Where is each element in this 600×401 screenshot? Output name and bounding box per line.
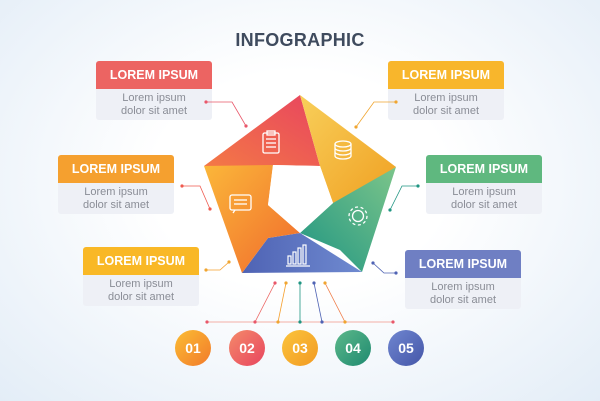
number circle 01: 01 [185, 340, 201, 356]
number circle 04: 04 [345, 340, 361, 356]
number circle 02: 02 [239, 340, 255, 356]
number circle 03: 03 [292, 340, 308, 356]
segment: green [300, 167, 396, 272]
box: mid-right green: LOREM IPSUM [440, 162, 528, 176]
icon: coins [335, 141, 351, 159]
box: bottom-left yellow: dolor sit amet [108, 291, 174, 303]
box: mid-right green: Lorem ipsum [452, 186, 516, 198]
box: mid-left orange: LOREM IPSUM [72, 162, 160, 176]
number circle 04 [335, 330, 371, 366]
box: top-right yellow [388, 61, 504, 120]
title: INFOGRAPHIC [235, 30, 365, 50]
segment: blue [242, 233, 362, 273]
icon: clipboard [263, 131, 279, 153]
icon: chat [230, 195, 251, 213]
number circle 05 [388, 330, 424, 366]
number circle 02 [229, 330, 265, 366]
number circle 05: 05 [398, 340, 414, 356]
segment: yellow [300, 95, 396, 203]
number circle 01 [175, 330, 211, 366]
number circle 03 [282, 330, 318, 366]
box: top-left red: LOREM IPSUM [110, 68, 198, 82]
box: top-right yellow: Lorem ipsum [414, 92, 478, 104]
box: bottom-left yellow [83, 247, 199, 306]
box: mid-left orange [58, 155, 174, 214]
connector lines [182, 102, 418, 322]
box: mid-right green: dolor sit amet [451, 199, 517, 211]
box: bottom-right blue: Lorem ipsum [431, 281, 495, 293]
box: bottom-right blue [405, 250, 521, 309]
box: top-right yellow: LOREM IPSUM [402, 68, 490, 82]
box: bottom-left yellow: LOREM IPSUM [97, 254, 185, 268]
icon: bar chart [286, 245, 310, 266]
segment: orange [204, 165, 300, 273]
box: top-left red: dolor sit amet [121, 105, 187, 117]
box: mid-right green [426, 155, 542, 214]
segment: red [204, 95, 320, 170]
box: mid-left orange: dolor sit amet [83, 199, 149, 211]
box: top-right yellow: dolor sit amet [413, 105, 479, 117]
box: mid-left orange: Lorem ipsum [84, 186, 148, 198]
box: top-left red: Lorem ipsum [122, 92, 186, 104]
box: top-left red [96, 61, 212, 120]
icon: gear [349, 207, 367, 225]
box: bottom-left yellow: Lorem ipsum [109, 278, 173, 290]
box: bottom-right blue: dolor sit amet [430, 294, 496, 306]
box: bottom-right blue: LOREM IPSUM [419, 257, 507, 271]
